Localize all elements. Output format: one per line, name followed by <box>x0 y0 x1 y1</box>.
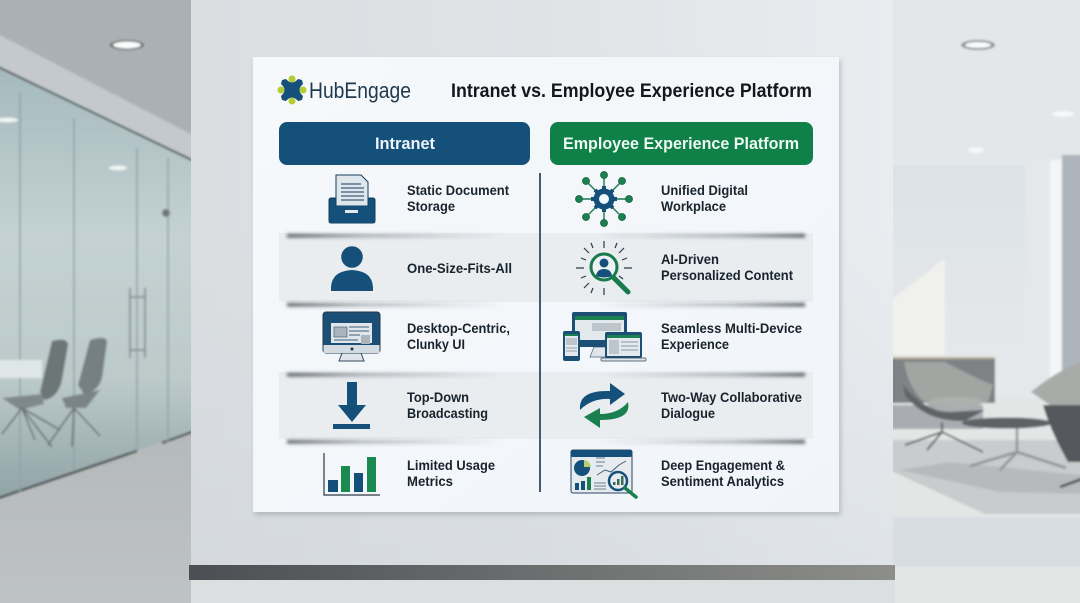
icon: file drawer <box>329 175 375 223</box>
row text: One-Size-Fits-All <box>407 260 512 276</box>
row text: Experience <box>661 336 729 352</box>
row text: Workplace <box>661 198 726 214</box>
row text: Limited Usage <box>407 457 495 473</box>
row text: Two-Way Collaborative <box>661 389 802 405</box>
icon: two-way arrows <box>580 383 628 428</box>
row text <box>407 182 509 214</box>
row text <box>407 320 510 352</box>
row: Limited Usage Metrics <box>324 453 495 495</box>
icon: analytics dashboard <box>571 450 636 497</box>
row text <box>661 457 785 489</box>
row text <box>661 320 802 352</box>
icon: multiple devices <box>563 312 646 361</box>
title: Intranet vs. Employee Experience Platform <box>451 80 812 102</box>
row text: Deep Engagement & <box>661 457 785 473</box>
icon: gear network <box>576 172 632 226</box>
row text: Unified Digital <box>661 182 748 198</box>
board shadow <box>255 60 841 515</box>
row: Top-Down Broadcasting <box>333 382 488 429</box>
row: Seamless Multi-Device Experience <box>563 312 802 361</box>
row text: Storage <box>407 198 455 214</box>
row text <box>661 389 802 421</box>
logo wordmark: HubEngage <box>309 78 411 103</box>
icon: down arrow <box>333 382 370 429</box>
row band: second row <box>279 233 813 306</box>
right lounge area <box>885 0 1080 603</box>
row text: Personalized Content <box>661 267 793 283</box>
row text: Top-Down <box>407 389 469 405</box>
row text: Metrics <box>407 473 453 489</box>
board surface <box>253 57 839 512</box>
icon: logo mark <box>278 76 306 104</box>
row text <box>407 389 488 421</box>
floor below wall <box>191 580 895 603</box>
left office with glass wall <box>0 0 200 603</box>
row text: Desktop-Centric, <box>407 320 510 336</box>
row: Deep Engagement & Sentiment Analytics <box>571 450 785 497</box>
row text: Clunky UI <box>407 336 465 352</box>
row: Static Document Storage <box>329 175 509 223</box>
column header: Employee Experience Platform: Employee Experience Platform <box>563 134 799 153</box>
row text: AI-Driven <box>661 251 719 267</box>
panel: comparison board <box>253 57 841 515</box>
row: Two-Way Collaborative Dialogue <box>580 383 802 428</box>
column divider <box>539 173 541 492</box>
icon: magnifier with person <box>576 241 632 295</box>
column header: Intranet <box>279 122 530 165</box>
column header: Employee Experience Platform <box>550 122 813 165</box>
icon: person <box>331 246 373 291</box>
row text <box>661 251 793 283</box>
row: One-Size-Fits-All <box>331 246 512 291</box>
row text: Sentiment Analytics <box>661 473 784 489</box>
row text: Dialogue <box>661 405 715 421</box>
baseboard <box>189 565 895 580</box>
centre wall <box>191 0 893 566</box>
row text: Seamless Multi-Device <box>661 320 802 336</box>
row text: Broadcasting <box>407 405 488 421</box>
row: Unified Digital Workplace <box>576 172 748 226</box>
row band: fourth row <box>279 372 813 444</box>
row: AI-Driven Personalized Content <box>576 241 793 295</box>
row: Desktop-Centric, Clunky UI <box>323 312 510 361</box>
row text <box>407 457 495 489</box>
logo: HubEngage <box>278 76 411 104</box>
column header: Intranet: Intranet <box>375 134 435 153</box>
icon: desktop monitor <box>323 312 380 361</box>
row text: Static Document <box>407 182 509 198</box>
row text <box>661 182 748 214</box>
icon: bar chart <box>324 453 380 495</box>
